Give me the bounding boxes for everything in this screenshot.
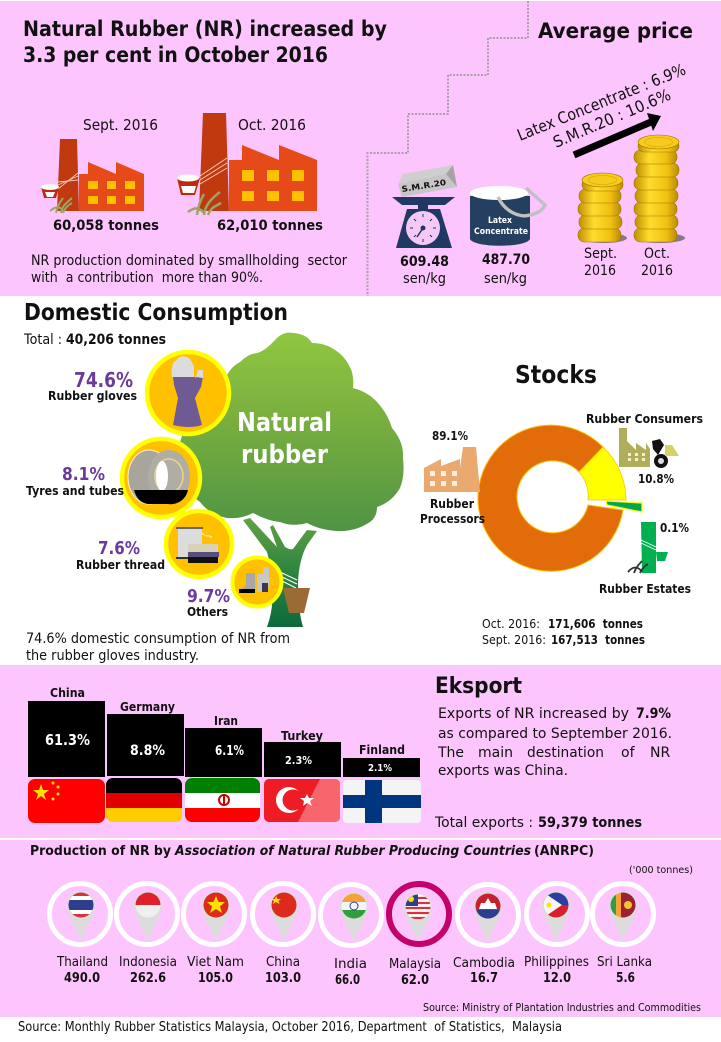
pin: Cambodia: Cambodia (453, 956, 515, 971)
bar: Iran: 6.1% (215, 744, 244, 759)
stat: others: 9.7% (187, 586, 230, 607)
title: 3.3 per cent in October 2016 (23, 43, 328, 67)
label: 10.8%: 10.8% (638, 471, 674, 486)
pin: Cambodia: 16.7 (470, 971, 498, 986)
pin: Malaysia highlighted: 62.0 (401, 973, 429, 988)
pin: Malaysia highlighted: Malaysia (389, 957, 441, 972)
total stocks Sept: Sept. 2016: (482, 632, 546, 647)
bar: Germany (107, 700, 184, 776)
stat: rubber thread: Rubber thread (76, 557, 165, 572)
icon: other rubber goods (232, 558, 282, 606)
heading: domestic consumption: Domestic Consumption (24, 300, 288, 326)
heading: ANRPC (30, 843, 594, 859)
pin: India (320, 884, 382, 988)
stat: rubber gloves (48, 368, 137, 403)
icon: tyres and tubes (122, 439, 200, 517)
source: ministry: Source: Ministry of Plantation Industries and Commodities (423, 1002, 701, 1014)
icon: rubber gloves (147, 352, 229, 434)
icon: coin stack September (578, 173, 627, 243)
panel: export (0, 665, 721, 838)
pin: Viet Nam: Viet Nam (187, 955, 244, 970)
total consumption: Total : (23, 332, 62, 348)
panel: domestic consumption (23, 300, 404, 664)
total exports: 59,379 tonnes (538, 815, 642, 831)
pin: China: China (266, 955, 300, 970)
stat: rubber gloves: Rubber gloves (48, 388, 137, 403)
stat: rubber gloves: 74.6% (74, 368, 133, 392)
label: Sept. 2016: Sept. 2016 (83, 116, 158, 134)
source: department of statistics: Source: Monthly Rubber Statistics Malaysia, October 2016, Department of Statistics, Malaysia (18, 1020, 562, 1035)
value: latex price: 487.70 (482, 252, 530, 268)
label: coin Oct: 2016 (641, 263, 673, 279)
export text: exports was China. (438, 763, 568, 779)
export text: as compared to September 2016. (438, 726, 672, 742)
value: S.M.R.20 price (400, 254, 449, 287)
bar: Germany: 8.8% (130, 743, 165, 759)
bar: Turkey: 2.3% (285, 754, 312, 767)
bar: Turkey: Turkey (281, 729, 323, 743)
icon: rubber processors factory (424, 447, 480, 492)
arrow: rising price (574, 113, 661, 155)
export text: NR (650, 745, 670, 761)
export text: destination (527, 745, 604, 761)
total stocks Oct: Oct. 2016: (482, 616, 540, 631)
pin: Thailand: Thailand (56, 955, 108, 970)
tree label (237, 408, 332, 470)
icon: rubber consumers factory (619, 428, 679, 468)
panel: stocks (420, 360, 703, 647)
bar: Finland: 2.1% (368, 763, 392, 774)
heading: ANRPC: Association of Natural Rubber Producing Countries (174, 843, 531, 859)
title (23, 17, 387, 67)
pin: Sri Lanka: 5.6 (616, 971, 635, 986)
tree label: Natural (237, 408, 332, 438)
pin: Sri Lanka (592, 884, 654, 986)
icon: small factory (41, 139, 144, 213)
flag: Finland (343, 780, 421, 823)
bar: Finland (343, 743, 420, 777)
stat: tyres and tubes: 8.1% (62, 464, 105, 485)
value: Oct tonnes: 62,010 tonnes (217, 218, 323, 234)
icon: rubber thread (166, 511, 232, 577)
label: rubber processors (420, 496, 485, 526)
bar: Turkey (264, 729, 341, 777)
pin: India: India (334, 957, 367, 972)
stat: rubber thread (76, 538, 165, 572)
tree label: rubber (241, 440, 328, 470)
heading: eksport: Eksport (435, 674, 522, 699)
total stocks Oct (482, 616, 643, 631)
pin: Indonesia: Indonesia (119, 955, 177, 970)
panel: ANRPC production (0, 840, 721, 1017)
icon: scale with S.M.R.20 block (392, 165, 457, 248)
total consumption (23, 332, 166, 348)
bar: Iran (185, 714, 262, 777)
pin: China: 103.0 (265, 971, 301, 986)
export text: Exports of NR increased by (438, 706, 629, 722)
heading: ANRPC: Production of NR by (30, 843, 171, 859)
pin: Philippines (524, 884, 589, 986)
value: Sept tonnes: 60,058 tonnes (53, 218, 159, 234)
label: rubber consumers: Rubber Consumers (586, 411, 703, 426)
donut chart: stocks share (478, 425, 642, 571)
pin: Viet Nam (184, 884, 244, 986)
label: rubber estates: Rubber Estates (599, 581, 691, 596)
pin: Philippines: Philippines (524, 955, 589, 970)
label: coin Oct: Oct. (644, 246, 670, 262)
pin: Viet Nam: 105.0 (198, 971, 233, 986)
export text: 7.9% (636, 706, 671, 722)
heading: stocks: Stocks (515, 360, 597, 389)
bar: China (28, 686, 105, 777)
unit note: ('000 tonnes) (629, 865, 693, 876)
value: S.M.R.20 price: sen/kg (403, 271, 446, 287)
bar: Finland: Finland (359, 743, 405, 757)
rotated price changes: S.M.R.20 : 10.6% (550, 85, 674, 152)
label: Oct. 2016: Oct. 2016 (238, 116, 306, 134)
value: S.M.R.20 price: 609.48 (400, 254, 449, 270)
flag: Turkey (264, 779, 340, 822)
bar: Iran: Iran (214, 714, 238, 728)
pin: Cambodia (453, 884, 518, 986)
icon: scale with S.M.R.20 block: S.M.R.20 (401, 178, 447, 194)
stat: others (187, 586, 230, 619)
pin: Sri Lanka: Sri Lanka (597, 955, 652, 970)
panel: production and average price (0, 1, 721, 296)
total exports (434, 815, 642, 831)
bar: China: 61.3% (45, 731, 90, 749)
icon: tree (179, 333, 404, 627)
pin: Indonesia (116, 884, 178, 986)
note: gloves share (26, 631, 290, 664)
bar: China: China (50, 686, 85, 700)
pin: Thailand (50, 884, 110, 986)
label: coin Sept: 2016 (584, 263, 616, 279)
value: latex price (482, 252, 530, 287)
total stocks Sept: 167,513 tonnes (551, 632, 645, 647)
note: smallholding sector: NR production dominated by smallholding sector (31, 253, 347, 269)
label: rubber processors: Rubber (430, 496, 475, 511)
stat: tyres and tubes (26, 464, 124, 498)
heading: average price: Average price (538, 19, 693, 43)
rotated price changes: Latex Concentrate : 6.9% (514, 60, 688, 145)
icon: latex concentrate bucket: Concentrate (474, 227, 528, 237)
icon: coin stack October (634, 135, 685, 243)
icon: latex concentrate bucket (470, 186, 545, 246)
stat: tyres and tubes: Tyres and tubes (26, 483, 124, 498)
label: 89.1%: 89.1% (432, 428, 468, 443)
note: gloves share: 74.6% domestic consumption of NR from (26, 631, 290, 647)
label: coin Oct (641, 246, 673, 279)
export text: main (478, 745, 513, 761)
pin: China (252, 884, 314, 986)
stat: others: Others (187, 604, 228, 619)
pin: Philippines: 12.0 (543, 971, 571, 986)
flag: Germany (106, 778, 182, 822)
icon: latex concentrate bucket: Latex (488, 216, 512, 226)
bar: Germany: Germany (120, 700, 175, 714)
flag: Iran (185, 778, 260, 822)
pin: Malaysia highlighted (389, 884, 449, 988)
pin: India: 66.0 (335, 973, 360, 988)
pin: Thailand: 490.0 (64, 971, 100, 986)
flag: China (28, 779, 105, 823)
export text: of (621, 745, 636, 761)
export text: The (437, 745, 464, 761)
export text (437, 706, 672, 779)
heading: ANRPC: (ANRPC) (534, 843, 594, 859)
stat: rubber thread: 7.6% (98, 538, 140, 559)
total consumption: 40,206 tonnes (66, 332, 166, 348)
label: rubber processors: Processors (420, 511, 485, 526)
value: latex price: sen/kg (484, 271, 527, 287)
icon: rubber estates tree (628, 522, 668, 573)
total stocks Sept (482, 632, 645, 647)
label: coin Sept (584, 246, 617, 279)
note: smallholding sector (31, 253, 347, 286)
pin: Indonesia: 262.6 (130, 971, 166, 986)
title: Natural Rubber (NR) increased by (23, 17, 387, 41)
icon: large factory (177, 113, 317, 215)
label: coin Sept: Sept. (584, 246, 617, 262)
note: smallholding sector: with a contribution more than 90%. (31, 270, 263, 286)
note: gloves share: the rubber gloves industry. (26, 648, 199, 664)
total stocks Oct: 171,606 tonnes (548, 616, 643, 631)
total exports: Total exports : (434, 815, 533, 831)
label: 0.1%: 0.1% (660, 520, 689, 535)
